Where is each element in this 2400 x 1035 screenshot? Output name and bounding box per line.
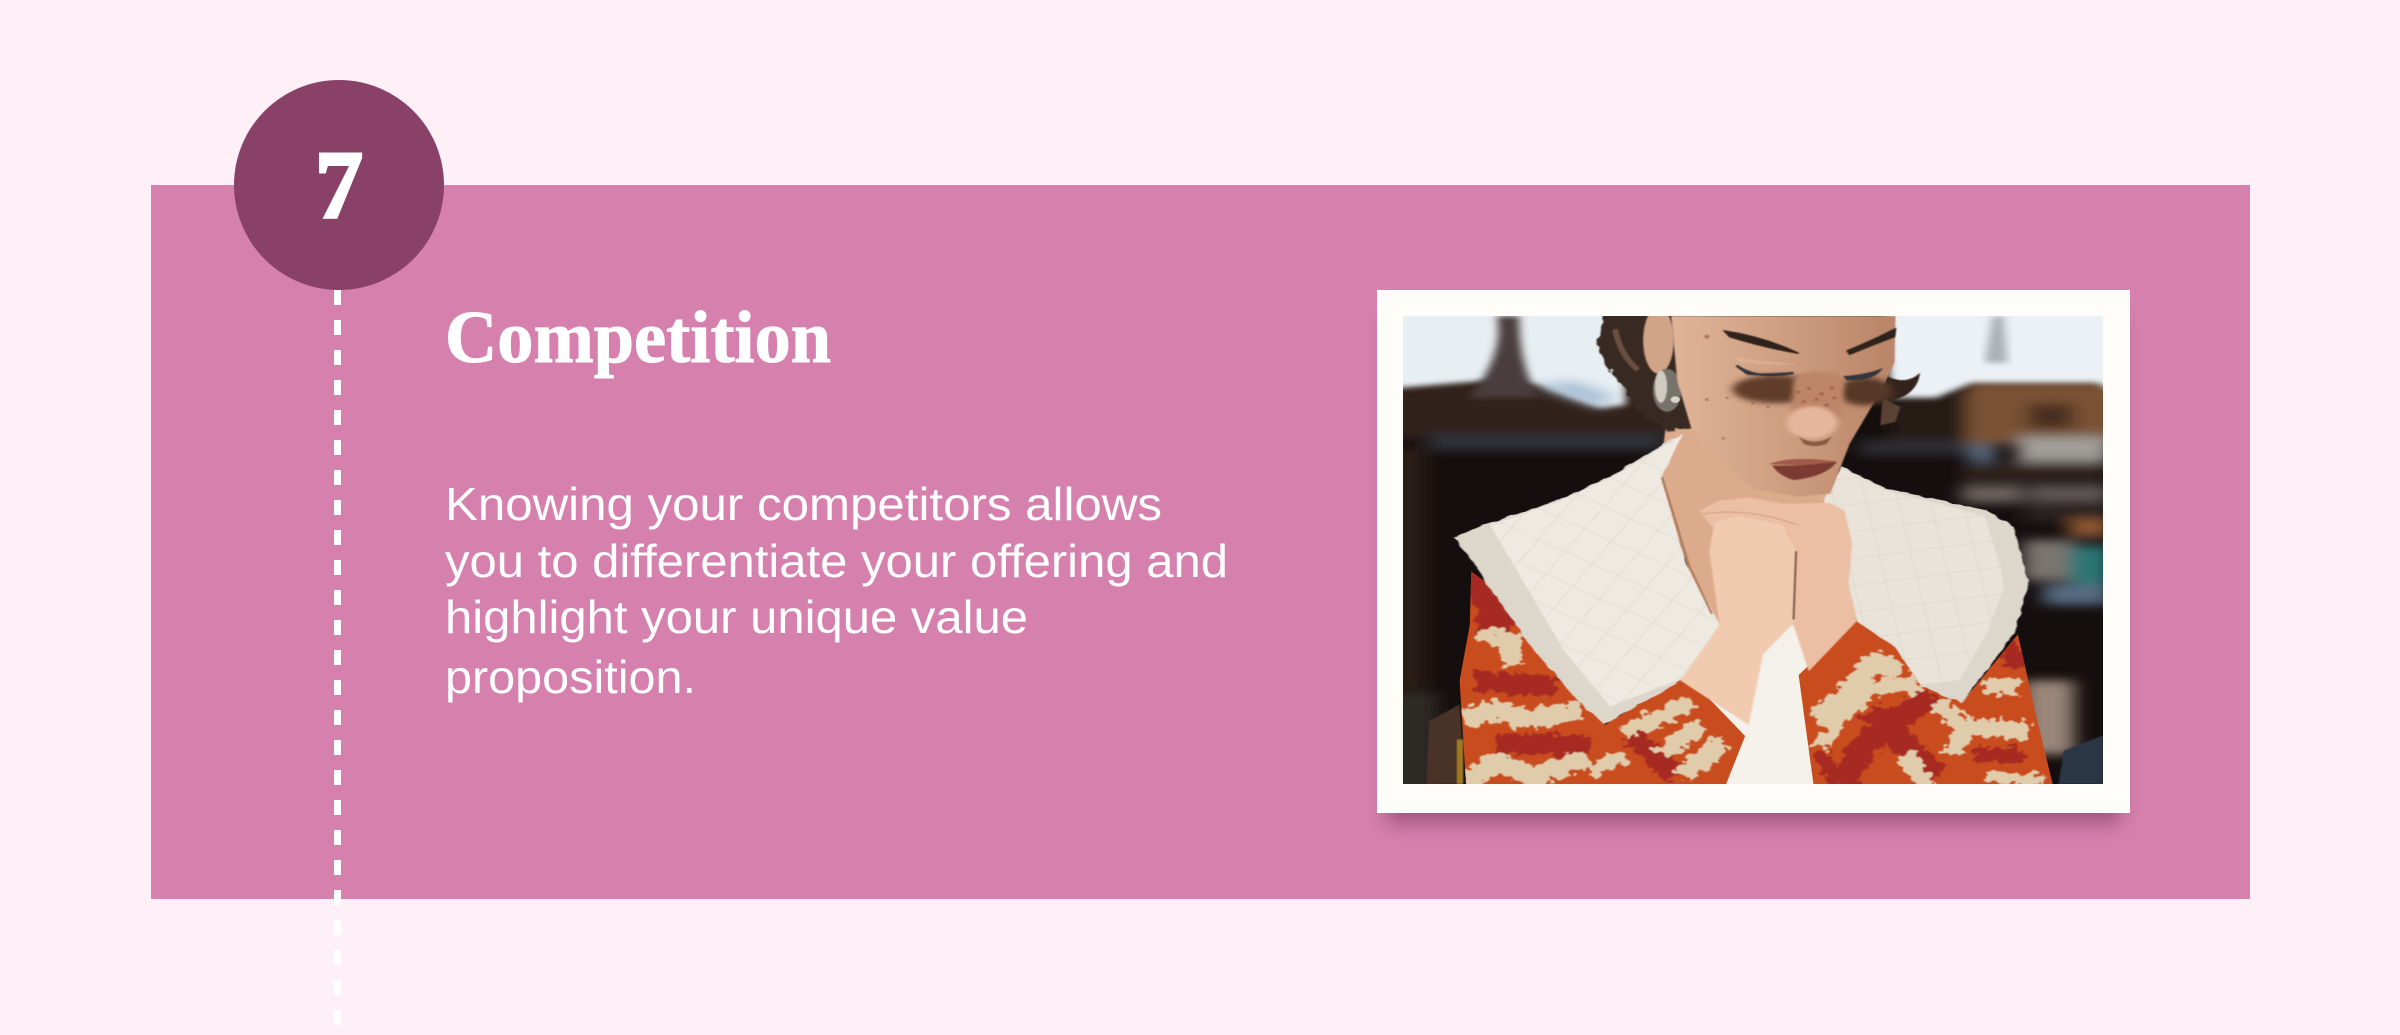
hands [1680,498,1857,725]
blurred room background [1381,307,2120,791]
sweater and shirt [1452,559,2064,788]
photo: woman resting chin on hands [1403,316,2103,784]
body text: highlight your unique value [445,591,1028,643]
body text [445,478,1228,703]
step number badge: 7 [315,131,363,238]
panel: pink card [151,185,2250,899]
step number badge [234,80,444,290]
body text: you to differentiate your offering and [445,535,1228,587]
photo frame with shadow [1377,290,2130,813]
face [1671,316,1895,496]
heading: Competition [445,297,831,379]
body text: proposition. [445,651,696,703]
neckline shadow [1662,477,1712,614]
body text: Knowing your competitors allows [445,478,1162,530]
ruffled quilted collar [1454,433,2029,724]
hair and earring [1596,307,1920,430]
dashed timeline line [334,290,341,1025]
neck [1661,427,1828,626]
jacket and chair at bottom edge [1426,705,2103,784]
